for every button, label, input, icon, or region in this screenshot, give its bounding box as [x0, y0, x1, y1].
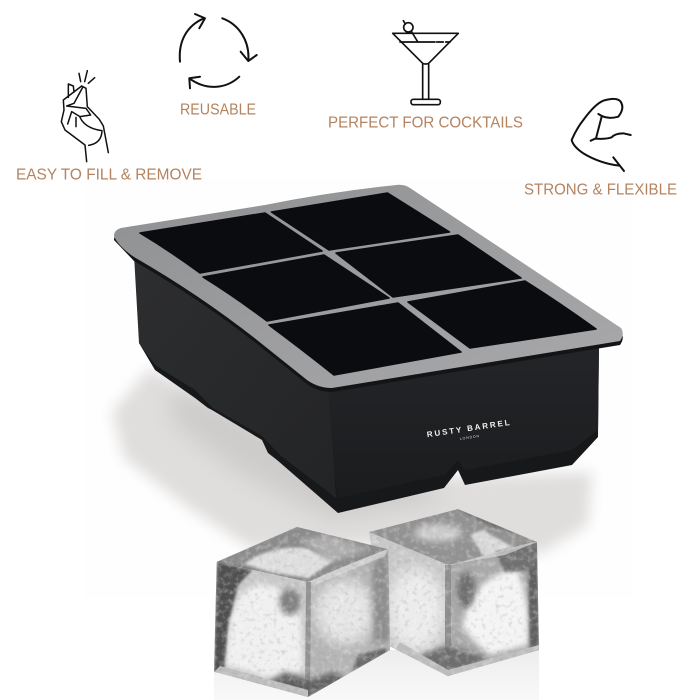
feature: strong and flexible: [524, 99, 677, 198]
icon: circular arrows: [180, 14, 257, 88]
brand location: LONDON: [460, 434, 480, 441]
ice cube back: [369, 505, 541, 680]
photo background: [85, 178, 632, 700]
right face: [308, 549, 390, 697]
floor shadow: [112, 368, 592, 554]
label: STRONG & FLEXIBLE: [524, 181, 677, 198]
cube reflections: [214, 650, 539, 700]
label: PERFECT FOR COCKTAILS: [328, 114, 523, 131]
tray feet: [139, 343, 599, 513]
top face: [217, 527, 388, 582]
rim underside: [114, 189, 623, 392]
tray front face: [328, 343, 599, 498]
left face: [370, 532, 448, 565]
bottom band: [268, 672, 345, 697]
top face: [369, 509, 537, 565]
label: EASY TO FILL & REMOVE: [16, 166, 202, 183]
brand name: RUSTY BARREL: [426, 418, 512, 439]
label: REUSABLE: [180, 101, 256, 118]
cavity 5: [269, 303, 461, 375]
icon: snapping fingers hand: [61, 71, 108, 162]
icon: martini glass: [393, 21, 458, 105]
bottom band: [420, 645, 486, 676]
icon: flexed arm: [572, 99, 631, 171]
tray left side: [134, 255, 336, 498]
ice tray: [114, 185, 623, 513]
feature: perfect for cocktails: [328, 21, 523, 131]
tray rim: [114, 185, 623, 388]
cavity 4: [336, 235, 521, 297]
ice cube front: [210, 522, 395, 700]
cavity 6: [408, 281, 596, 348]
cavity 1: [140, 213, 322, 273]
left face: [218, 562, 308, 582]
feature: reusable: [180, 14, 257, 118]
feature: easy to fill and remove: [16, 71, 202, 183]
right face: [448, 542, 539, 676]
cavity 2: [272, 193, 450, 250]
cavity 3: [203, 255, 389, 321]
